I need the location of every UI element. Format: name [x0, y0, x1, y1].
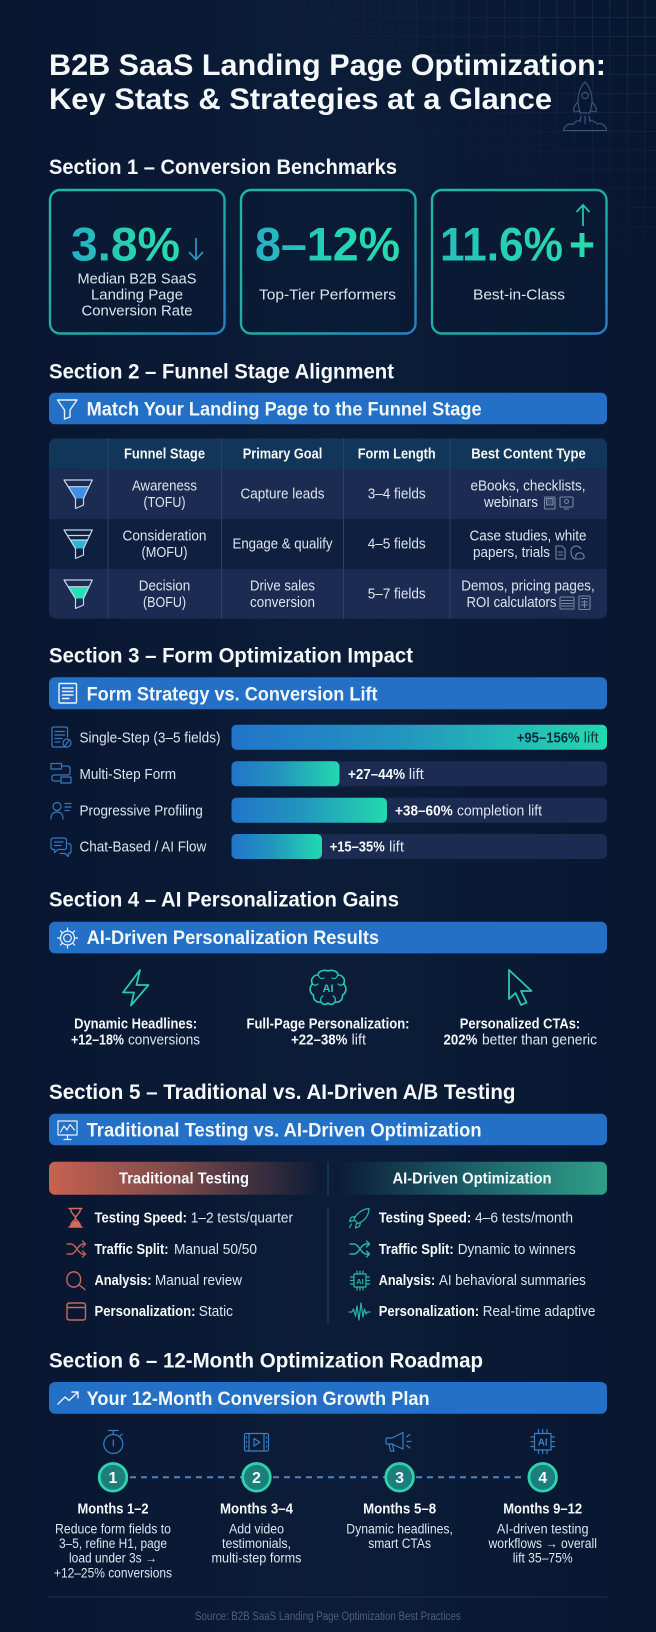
icon: monitor chart	[58, 1121, 77, 1140]
table header row	[124, 448, 586, 462]
panel: personalized CTAs: 202%	[444, 1033, 478, 1049]
panel: traditional testing	[49, 1162, 322, 1320]
icon: down arrow	[189, 238, 203, 260]
stat: 8-12%: 8–12%	[255, 218, 400, 271]
row: testing speed: 1–2 tests/quarter	[191, 1211, 293, 1227]
bar row: progressive profiling: completion lift	[457, 803, 542, 819]
roadmap step 4	[488, 1430, 597, 1566]
icon: hourglass	[69, 1208, 82, 1227]
step marker 1: 1	[109, 1470, 118, 1487]
table row: awareness	[132, 479, 586, 511]
section 6 heading: Section 6 – 12-Month Optimization Roadmap	[49, 1349, 483, 1372]
row: testing speed: Testing Speed:	[379, 1211, 471, 1227]
panel: full-page personalization: Full-Page Personalization:	[246, 1016, 410, 1032]
banner: form strategy	[49, 677, 607, 709]
row: analysis: Analysis:	[94, 1273, 152, 1289]
row: testing speed: Testing Speed:	[94, 1211, 187, 1227]
banner: AI personalization: AI-Driven Personalization Results	[87, 928, 379, 949]
icon: form with pen	[52, 727, 71, 747]
icon: up arrow	[576, 205, 590, 226]
roadmap step 2: Months 3–4	[220, 1501, 293, 1517]
table row: decision	[139, 579, 595, 611]
roadmap step 3: smart CTAs	[368, 1536, 431, 1551]
table header row: Form Length	[358, 447, 436, 463]
title: Key Stats & Strategies at a Glance	[49, 83, 552, 116]
step marker 4: 4	[538, 1470, 547, 1487]
bar row: chat-based: lift	[389, 840, 404, 856]
icon: megaphone	[386, 1432, 411, 1451]
roadmap step 1: load under 3s →	[69, 1551, 157, 1566]
roadmap step 3: Dynamic headlines,	[346, 1521, 453, 1536]
panel: personalized CTAs: Personalized CTAs:	[460, 1016, 580, 1032]
banner: AI personalization	[49, 922, 607, 953]
row: personalization: Static	[199, 1304, 233, 1320]
row: traffic split: Traffic Split:	[379, 1242, 454, 1258]
table row: awareness: Awareness	[132, 479, 197, 495]
icons: content types	[544, 497, 590, 610]
label: median: Landing Page	[91, 288, 183, 304]
banner: testing comparison	[49, 1114, 607, 1145]
header: traditional	[49, 1162, 322, 1195]
stat: 3.8%: 3.8%	[71, 218, 180, 271]
section 5 heading: Section 5 – Traditional vs. AI-Driven A/B Testing	[49, 1081, 516, 1104]
row: traffic split	[67, 1241, 257, 1258]
panel: AI-driven optimization	[335, 1162, 607, 1320]
table row: consideration	[122, 529, 586, 561]
bar row: multi-step	[51, 761, 607, 786]
icon: AI brain: AI	[322, 983, 334, 995]
table row: awareness: webinars	[483, 495, 538, 511]
bar row: single-step: lift	[584, 731, 599, 747]
roadmap step 4: lift 35–75%	[513, 1551, 573, 1566]
icon: AI chip	[350, 1271, 370, 1290]
panel: dynamic headlines: +12–18%	[71, 1033, 124, 1049]
bar row: chat-based: Chat-Based / AI Flow	[80, 840, 207, 856]
icon: AI chip: AI	[538, 1438, 548, 1448]
icon: magnifier	[67, 1272, 85, 1290]
table row: awareness: eBooks, checklists,	[470, 479, 586, 495]
table row: decision: Decision	[139, 579, 190, 595]
icon: stopwatch	[104, 1430, 123, 1454]
row: analysis	[67, 1272, 242, 1290]
row: analysis: AI behavioral summaries	[439, 1273, 586, 1289]
panel: median conversion card	[50, 190, 224, 334]
table row: decision: (BOFU)	[143, 595, 186, 611]
roadmap step 4: workflows → overall	[488, 1536, 597, 1551]
table row: consideration: papers, trials	[473, 545, 550, 561]
table row: decision: conversion	[250, 595, 315, 611]
stat: 11.6%+: 11.6%	[440, 218, 563, 271]
icon: AI chip: AI	[356, 1277, 364, 1286]
row: personalization	[349, 1303, 595, 1320]
icon: person with lines	[51, 802, 71, 819]
banner: form strategy: Form Strategy vs. Conversion Lift	[87, 685, 378, 706]
panel: top-tier card	[241, 190, 416, 334]
roadmap step 3	[346, 1432, 453, 1551]
table header row: Funnel Stage	[124, 447, 205, 463]
icon: shuffle	[67, 1241, 86, 1257]
table row: consideration: Consideration	[122, 529, 206, 545]
label: best-in-class: Best-in-Class	[473, 288, 565, 304]
banner: funnel stage: Match Your Landing Page to the Funnel Stage	[87, 400, 482, 421]
row: traffic split: Traffic Split:	[94, 1242, 168, 1258]
icon: rocket	[350, 1208, 369, 1228]
column divider	[327, 1162, 329, 1323]
panel: dynamic headlines: Dynamic Headlines:	[74, 1016, 197, 1032]
row: personalization: Personalization:	[379, 1304, 479, 1320]
bar row: multi-step: +27–44%	[348, 767, 405, 783]
bar row: single-step: Single-Step (3–5 fields)	[80, 731, 220, 747]
table row: decision: 5–7 fields	[368, 587, 426, 603]
step marker 3: 3	[395, 1470, 404, 1487]
source note: Source: B2B SaaS Landing Page Optimization Best Practices	[195, 1611, 461, 1623]
section 2 heading: Section 2 – Funnel Stage Alignment	[49, 360, 394, 383]
row: testing speed	[69, 1208, 293, 1227]
banner: funnel stage	[49, 393, 607, 424]
icon: trend line	[58, 1392, 78, 1404]
bar row: multi-step: Multi-Step Form	[80, 767, 176, 783]
table row: consideration: Engage & qualify	[232, 537, 333, 553]
icon: chat bubbles	[51, 838, 71, 856]
roadmap step 1: Reduce form fields to	[55, 1521, 171, 1536]
row: traffic split: Dynamic to winners	[458, 1242, 576, 1258]
roadmap step 2: Add video	[229, 1521, 284, 1536]
roadmap step 1: 3–5, refine H1, page	[59, 1536, 167, 1551]
table row: awareness: Capture leads	[240, 487, 324, 503]
roadmap step 3: Months 5–8	[363, 1501, 436, 1517]
banner: growth plan: Your 12-Month Conversion Growth Plan	[87, 1389, 430, 1410]
title: B2B SaaS Landing Page Optimization:	[49, 49, 606, 82]
header: traditional: Traditional Testing	[119, 1170, 249, 1187]
icon: browser window	[67, 1303, 86, 1320]
table row: awareness: (TOFU)	[144, 495, 186, 511]
bar row: single-step: +95–156%	[517, 731, 580, 747]
row: personalization: Personalization:	[94, 1304, 196, 1320]
row: analysis	[350, 1271, 586, 1290]
row: traffic split	[350, 1241, 576, 1258]
roadmap step 1: +12–25% conversions	[54, 1565, 172, 1580]
bar row: progressive profiling: Progressive Profiling	[80, 803, 203, 819]
row: analysis: Manual review	[155, 1273, 242, 1289]
header: AI-driven: AI-Driven Optimization	[392, 1170, 552, 1187]
panel: full-page personalization: +22–38%	[291, 1033, 348, 1049]
icon: document	[59, 684, 76, 703]
icon: funnel outline	[58, 400, 77, 419]
bar row: chat-based: +15–35%	[330, 840, 385, 856]
roadmap step 4: Months 9–12	[503, 1501, 582, 1517]
icon: AI brain	[310, 970, 346, 1004]
title	[49, 49, 606, 116]
table row: decision: Demos, pricing pages,	[461, 579, 595, 595]
label: median: Conversion Rate	[82, 304, 192, 320]
stat: 11.6%+: +	[569, 218, 595, 271]
panel: personalized CTAs	[444, 970, 597, 1049]
icon: lightning	[123, 970, 148, 1006]
icon: cursor	[509, 970, 532, 1005]
label: median: Median B2B SaaS	[78, 271, 196, 287]
row: testing speed	[350, 1208, 573, 1228]
panel: dynamic headlines: conversions	[128, 1033, 200, 1049]
table row: decision: Drive sales	[250, 579, 315, 595]
roadmap step 4: AI-driven testing	[497, 1521, 588, 1536]
bar chart: form strategy lift	[51, 725, 607, 859]
roadmap step 2: testimonials,	[222, 1536, 291, 1551]
step marker 1	[99, 1464, 127, 1491]
timeline connector	[130, 1476, 526, 1478]
table row: consideration: Case studies, white	[470, 529, 586, 545]
banner: testing comparison: Traditional Testing vs. AI-Driven Optimization	[87, 1121, 482, 1142]
header: AI-driven	[335, 1162, 607, 1195]
roadmap step 1	[54, 1430, 172, 1580]
icon: TOFU funnel	[64, 480, 92, 508]
icon: waveform	[349, 1303, 370, 1320]
panel: full-page personalization	[246, 970, 410, 1049]
roadmap step 1: Months 1–2	[78, 1501, 148, 1517]
bar row: single-step	[52, 725, 607, 750]
bar row: multi-step: lift	[409, 767, 424, 783]
table row: decision: ROI calculators	[466, 595, 556, 611]
label: top-tier: Top-Tier Performers	[259, 288, 396, 304]
icon: BOFU funnel	[64, 580, 92, 608]
roadmap step 2	[212, 1434, 302, 1566]
icon: flow steps	[51, 764, 71, 783]
row: analysis: Analysis:	[379, 1273, 435, 1289]
table row: consideration: (MOFU)	[142, 545, 188, 561]
panel: full-page personalization: lift	[352, 1033, 366, 1049]
table: funnel stages	[49, 438, 607, 619]
table header row: Primary Goal	[243, 447, 322, 463]
panel: personalized CTAs: better than generic	[482, 1033, 597, 1049]
section 3 heading: Section 3 – Form Optimization Impact	[49, 645, 413, 668]
bar row: chat-based	[51, 834, 607, 859]
table header row: Best Content Type	[471, 447, 586, 463]
icon: video frame	[244, 1434, 268, 1451]
bar row: progressive profiling: +38–60%	[395, 803, 453, 819]
icon: MOFU funnel	[64, 530, 92, 558]
row: personalization: Real-time adaptive	[483, 1304, 595, 1320]
bar row: progressive profiling	[51, 798, 607, 823]
icon: rocket	[564, 82, 606, 130]
panel: dynamic headlines	[71, 970, 200, 1049]
table row: consideration: 4–5 fields	[368, 537, 426, 553]
section 4 heading: Section 4 – AI Personalization Gains	[49, 889, 399, 912]
label: median	[78, 271, 196, 320]
table row: awareness: 3–4 fields	[368, 487, 426, 503]
icon: shuffle	[350, 1241, 370, 1257]
section 1 heading: Section 1 – Conversion Benchmarks	[49, 156, 397, 179]
icon: gear	[58, 928, 78, 948]
row: traffic split: Manual 50/50	[174, 1242, 257, 1258]
step marker 2: 2	[252, 1470, 261, 1487]
row: testing speed: 4–6 tests/month	[475, 1211, 573, 1227]
row: personalization	[67, 1303, 233, 1320]
banner: growth plan	[49, 1382, 607, 1414]
panel: best-in-class card	[432, 190, 606, 334]
roadmap step 2: multi-step forms	[212, 1551, 302, 1566]
